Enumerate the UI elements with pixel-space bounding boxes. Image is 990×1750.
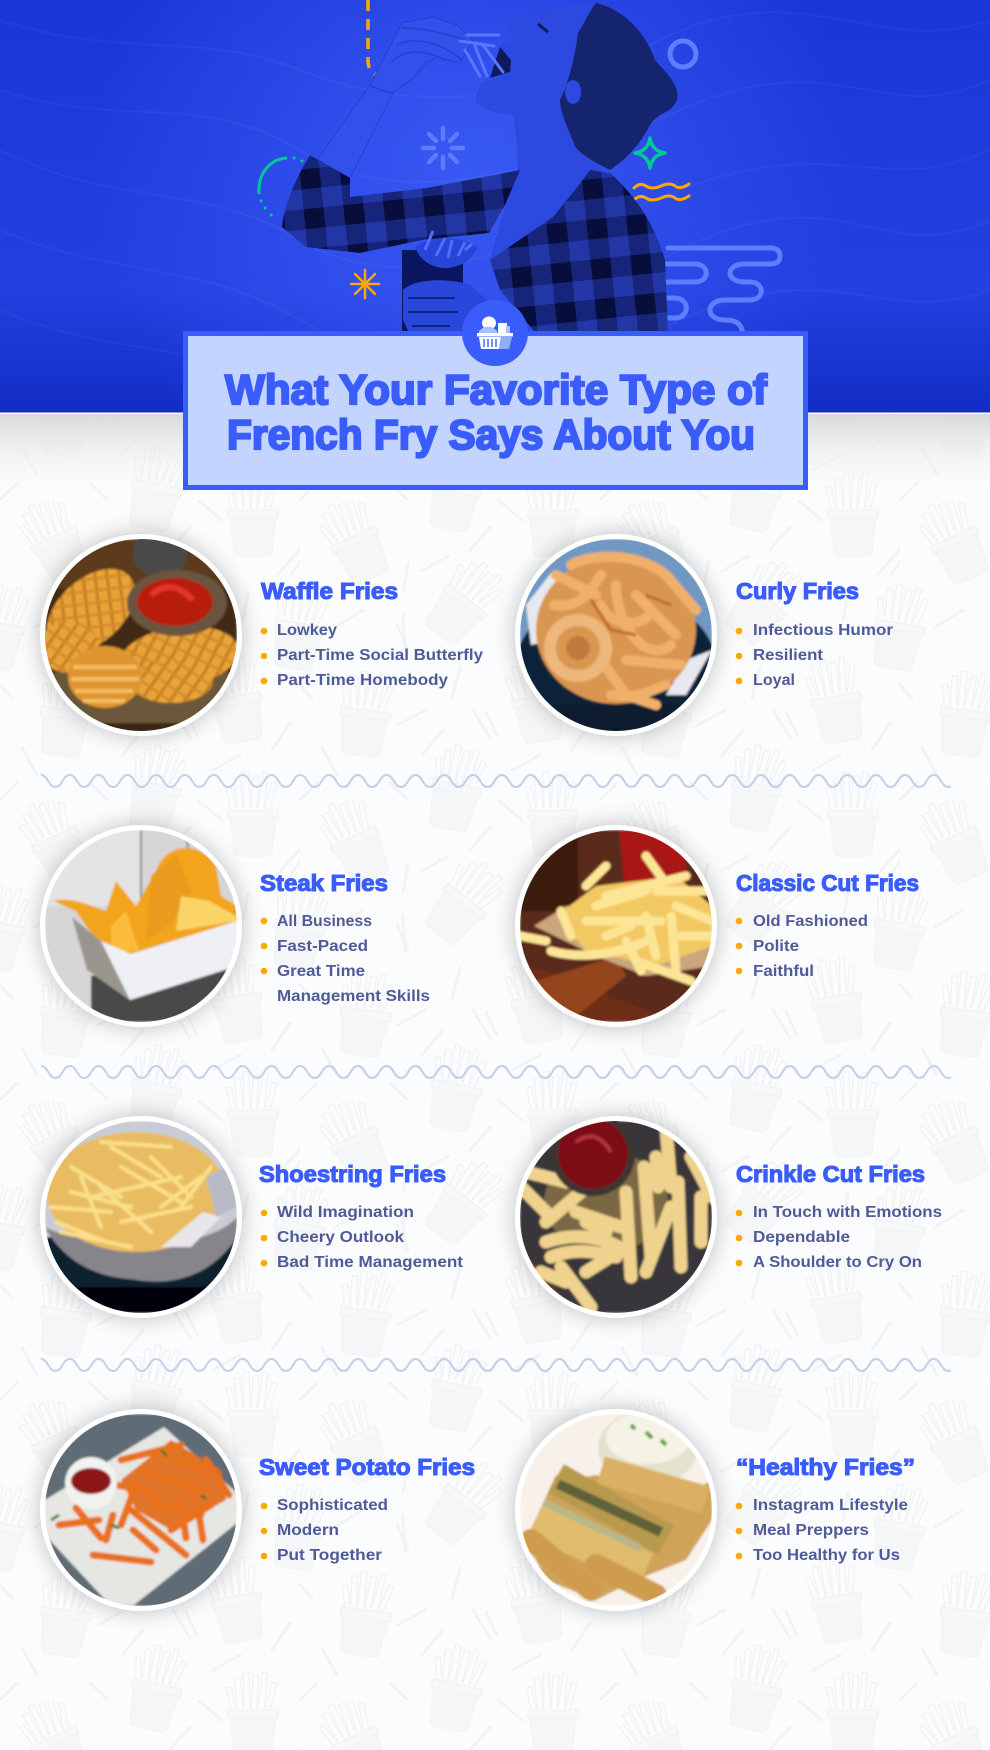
traits: crinkle cut fries bbox=[736, 1204, 942, 1271]
photo: steak fries bbox=[40, 825, 242, 1027]
traits: crinkle cut fries: A Shoulder to Cry On bbox=[753, 1254, 922, 1271]
decoration: spinner bbox=[423, 128, 463, 168]
traits: shoestring fries: Bad Time Management bbox=[277, 1254, 464, 1271]
traits: crinkle cut fries: Dependable bbox=[753, 1229, 850, 1246]
traits: classic cut fries: Old Fashioned bbox=[753, 913, 868, 930]
traits: sweet potato fries: Put Together bbox=[277, 1547, 382, 1564]
heading: classic cut fries: Classic Cut Fries bbox=[736, 870, 919, 896]
photo: waffle fries bbox=[23, 528, 259, 736]
heading: steak fries: Steak Fries bbox=[260, 870, 388, 896]
traits: classic cut fries: Faithful bbox=[753, 963, 814, 980]
hero bottom edge bbox=[0, 412, 990, 414]
panel: shoestring fries bbox=[40, 1116, 464, 1318]
panel: classic cut fries bbox=[515, 825, 919, 1027]
traits: waffle fries: Lowkey bbox=[277, 622, 337, 639]
traits: steak fries: Management Skills bbox=[277, 988, 430, 1005]
decoration: green sparkle bbox=[635, 138, 665, 168]
decoration: green arc bbox=[259, 158, 302, 215]
panel: curly fries bbox=[515, 534, 893, 737]
panel: waffle fries bbox=[23, 528, 483, 736]
traits: curly fries: Infectious Humor bbox=[753, 622, 893, 639]
traits: shoestring fries: Cheery Outlook bbox=[277, 1229, 404, 1246]
panel: healthy fries bbox=[515, 1409, 915, 1611]
traits: classic cut fries: Polite bbox=[753, 938, 799, 955]
traits: waffle fries bbox=[261, 622, 483, 689]
title box bbox=[186, 334, 806, 488]
traits: steak fries bbox=[261, 913, 430, 1005]
traits: healthy fries: Too Healthy for Us bbox=[753, 1547, 900, 1564]
title: French Fry Says About You bbox=[227, 411, 755, 458]
heading: curly fries: Curly Fries bbox=[736, 578, 859, 604]
title: What Your Favorite Type of bbox=[225, 366, 768, 413]
panel: sweet potato fries bbox=[40, 1409, 475, 1611]
photo: shoestring fries bbox=[40, 1116, 242, 1318]
traits: sweet potato fries bbox=[261, 1497, 388, 1564]
photo: sweet potato fries bbox=[40, 1409, 242, 1611]
icon: basket badge bbox=[462, 300, 528, 366]
photo: healthy fries bbox=[515, 1409, 717, 1611]
traits: waffle fries: Part-Time Social Butterfly bbox=[277, 647, 483, 664]
traits: sweet potato fries: Sophisticated bbox=[277, 1497, 388, 1514]
traits: curly fries bbox=[736, 622, 893, 689]
traits: sweet potato fries: Modern bbox=[277, 1522, 339, 1539]
decoration: orange dashed line bbox=[368, 0, 376, 75]
divider waves bbox=[41, 775, 990, 1371]
traits: classic cut fries bbox=[736, 913, 868, 980]
traits: curly fries: Loyal bbox=[753, 672, 795, 689]
traits: shoestring fries: Wild Imagination bbox=[277, 1204, 414, 1221]
heading: waffle fries: Waffle Fries bbox=[261, 578, 398, 604]
traits: waffle fries: Part-Time Homebody bbox=[277, 672, 448, 689]
traits: shoestring fries bbox=[261, 1204, 464, 1271]
traits: healthy fries: Instagram Lifestyle bbox=[753, 1497, 908, 1514]
panel: steak fries bbox=[40, 825, 430, 1027]
traits: steak fries: Fast-Paced bbox=[277, 938, 368, 955]
traits: steak fries: Great Time bbox=[277, 963, 365, 980]
decoration: orange asterisk bbox=[351, 270, 379, 298]
panel: crinkle cut fries bbox=[515, 1112, 942, 1318]
woman eating fries bbox=[282, 3, 677, 331]
traits: curly fries: Resilient bbox=[753, 647, 824, 664]
heading: crinkle cut fries: Crinkle Cut Fries bbox=[736, 1161, 925, 1187]
photo: classic cut fries bbox=[515, 825, 717, 1027]
photo: crinkle cut fries bbox=[515, 1112, 717, 1318]
traits: healthy fries: Meal Preppers bbox=[753, 1522, 869, 1539]
heading: healthy fries: “Healthy Fries” bbox=[736, 1454, 915, 1480]
decoration: orange waves bbox=[634, 184, 689, 200]
hero banner bbox=[0, 0, 990, 413]
traits: healthy fries bbox=[736, 1497, 908, 1564]
decoration: ring bbox=[670, 41, 696, 67]
photo: curly fries bbox=[515, 534, 717, 737]
traits: steak fries: All Business bbox=[277, 913, 372, 930]
traits: crinkle cut fries: In Touch with Emotions bbox=[753, 1204, 942, 1221]
heading: shoestring fries: Shoestring Fries bbox=[259, 1161, 446, 1187]
heading: sweet potato fries: Sweet Potato Fries bbox=[259, 1454, 475, 1480]
decoration: lavender squiggle bbox=[660, 248, 780, 335]
